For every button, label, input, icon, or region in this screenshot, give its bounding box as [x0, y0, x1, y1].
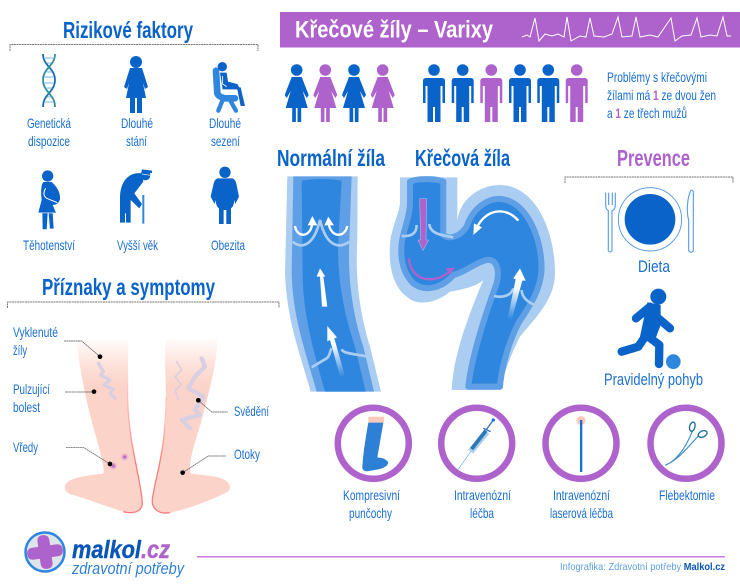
- label: Dlouhé stání: [121, 115, 153, 149]
- illustration: legs: [64, 340, 230, 513]
- label: Vyšší věk: Vyšší věk: [117, 237, 159, 253]
- label: Kompresivní punčochy: Kompresivní: [343, 487, 400, 503]
- logo: malkol.cz: [25, 532, 185, 578]
- label: Dlouhé sezení: sezení: [211, 133, 240, 149]
- varicose veins: [98, 358, 205, 428]
- bracket: symptoms: [8, 302, 279, 308]
- panel: symptoms: [8, 274, 279, 513]
- flow arrows: [317, 268, 345, 376]
- logo mark: [25, 532, 65, 572]
- text: statistic: Problémy s křečovými: [607, 69, 707, 85]
- label: Dlouhé sezení: Dlouhé: [209, 115, 241, 131]
- label: Dlouhé stání: Dlouhé: [121, 115, 153, 131]
- icon: pregnant woman: [38, 170, 60, 229]
- icon: elderly person with cane: [120, 170, 152, 224]
- heading: Prevence: Prevence: [617, 145, 690, 171]
- label: Otoky: Otoky: [234, 446, 260, 462]
- diagram: normal vein: [285, 176, 381, 392]
- panel: risk factors: [10, 17, 258, 253]
- footer credit: Infografika: Zdravotní potřeby Malkol.cz: [560, 561, 725, 573]
- label: Intravenózní léčba: Intravenózní: [454, 487, 511, 503]
- label: Pulzující bolest: bolest: [13, 399, 40, 415]
- left leg: [65, 340, 142, 513]
- label: Vředy: Vředy: [13, 439, 38, 455]
- flow arrow: up: [507, 268, 526, 320]
- reflux arrow: curved: [409, 258, 452, 279]
- label: Intravenózní léčba: léčba: [470, 505, 494, 521]
- icon: ECG line: [522, 17, 731, 41]
- text: statistic: žílami má 1 ze dvou žen: [607, 87, 716, 103]
- heading: Příznaky a symptomy: Příznaky a symptomy: [42, 274, 215, 300]
- label: Kompresivní punčochy: [343, 487, 400, 521]
- label: Genetická dispozice: [27, 115, 71, 149]
- label: Dlouhé sezení: [209, 115, 241, 149]
- label: Intravenózní laserová léčba: laserová léčba: [550, 505, 613, 521]
- title: Křečové žíly – Varixy: Křečové žíly – Varixy: [295, 16, 493, 44]
- icon: seated person: [216, 62, 245, 111]
- label: Vyklenuté žíly: Vyklenuté: [13, 324, 58, 340]
- label: Pulzující bolest: [13, 381, 50, 415]
- label: Intravenózní laserová léčba: [550, 487, 613, 521]
- label: Pulzující bolest: Pulzující: [13, 381, 50, 397]
- label: Intravenózní léčba: [454, 487, 511, 521]
- wordmark: malkol.cz: [72, 536, 170, 564]
- icon: obese person: [211, 167, 239, 224]
- title banner: [280, 12, 740, 48]
- text: statistic: a 1 ze třech mužů: [607, 105, 687, 121]
- label: Dieta: Dieta: [638, 258, 671, 276]
- icon: surgical forceps: [650, 408, 722, 479]
- label: Kompresivní punčochy: punčochy: [349, 505, 392, 521]
- icon: plate with cutlery: [606, 188, 693, 252]
- valves: [402, 224, 537, 306]
- pictogram: men, 1 of 3: [423, 64, 588, 122]
- callout lines and dots: [64, 341, 228, 473]
- label: Vyklenuté žíly: [13, 324, 58, 358]
- panel: vein comparison: [277, 145, 555, 392]
- label: Svědění: Svědění: [234, 403, 269, 419]
- label: Genetická dispozice: dispozice: [28, 133, 70, 149]
- valves: [293, 220, 368, 367]
- text: statistic: [607, 69, 716, 121]
- label: Vyklenuté žíly: žíly: [13, 342, 27, 358]
- reflux arrow: down: [418, 199, 429, 251]
- ulcers: [109, 453, 129, 470]
- icon: laser fibre: [546, 408, 616, 479]
- label: Pravidelný pohyb: Pravidelný pohyb: [604, 371, 703, 389]
- right leg: [152, 340, 230, 513]
- bracket: prevention: [565, 177, 733, 183]
- label: Těhotenství: Těhotenství: [23, 237, 75, 253]
- icon: standing woman: [124, 56, 148, 113]
- footer rule: [197, 556, 725, 558]
- label: Genetická dispozice: Genetická: [27, 115, 71, 131]
- panel: treatments: [338, 408, 722, 521]
- panel: prevention: [565, 145, 733, 389]
- icon: compression stocking: [338, 408, 409, 479]
- pictogram: women, 1 of 2: [285, 64, 395, 122]
- label: Dlouhé stání: stání: [126, 133, 147, 149]
- icon: DNA: [43, 54, 55, 107]
- heading: Rizikové faktory: Rizikové faktory: [63, 17, 193, 43]
- label: Obezita: Obezita: [211, 237, 245, 253]
- flow arrow: curved: [477, 211, 518, 227]
- icon: runner with ball: [622, 289, 681, 369]
- label: Flebektomie: Flebektomie: [659, 487, 715, 503]
- bracket: risk factors: [10, 44, 258, 51]
- tagline: zdravotní potřeby: [71, 559, 185, 578]
- heading: Křečová žíla: Křečová žíla: [415, 145, 510, 171]
- label: Intravenózní laserová léčba: Intravenózní: [553, 487, 610, 503]
- heading: Normální žíla: Normální žíla: [277, 145, 385, 171]
- diagram: varicose vein: [390, 177, 555, 390]
- panel: prevalence statistics: [285, 64, 716, 122]
- icon: syringe: [441, 408, 512, 479]
